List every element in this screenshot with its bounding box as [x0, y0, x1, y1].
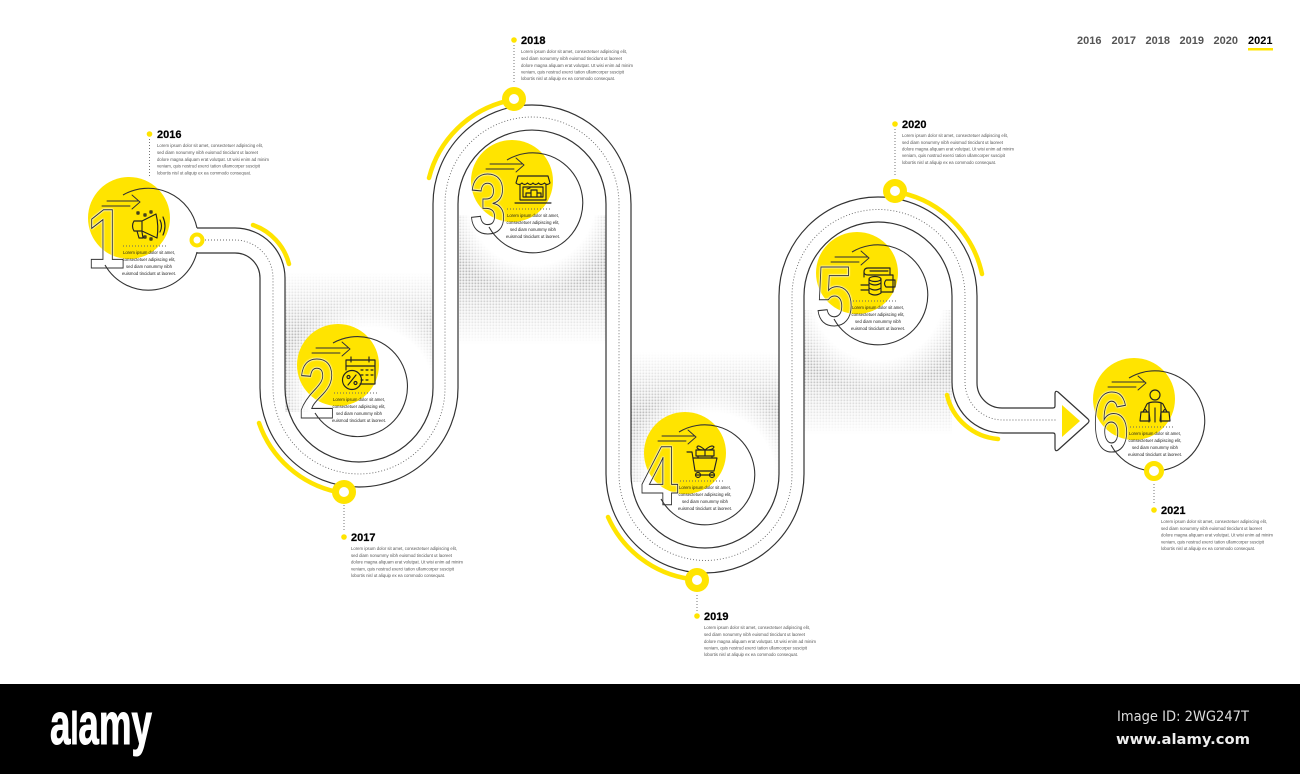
caption 1: consectetuer adipiscing elit, — [122, 257, 176, 262]
dotted rule 3 — [507, 208, 552, 210]
year block 2017: 2017 — [351, 532, 375, 544]
year block 2016: Lorem ipsum dolor sit amet, consectetuer adipiscing elit, — [157, 143, 263, 148]
dotted rule 5 — [853, 300, 898, 302]
year navigation legend — [1077, 35, 1273, 50]
arrow 5 — [831, 251, 869, 265]
caption 1: Lorem ipsum dolor sit amet, — [123, 250, 175, 255]
number 5: 5 — [816, 249, 853, 343]
dotted rule 4 — [680, 480, 725, 482]
icon: megaphone — [132, 211, 165, 240]
year navigation legend: 2017 — [1112, 35, 1136, 47]
caption 4: consectetuer adipiscing elit, — [678, 492, 732, 497]
caption 3: euismod tincidunt ut laoreet. — [506, 234, 560, 239]
year block 2018: 2018 — [521, 35, 545, 47]
number 3: 3 — [470, 157, 506, 251]
year navigation legend: 2018 — [1146, 35, 1170, 47]
caption 2: consectetuer adipiscing elit, — [332, 404, 386, 409]
year block 2021: Lorem ipsum dolor sit amet, consectetuer adipiscing elit, — [1161, 519, 1267, 524]
year block 2016: veniam, quis nostrud exerci tation ullamcorper suscipit — [157, 164, 261, 168]
number 4: 4 — [641, 429, 678, 523]
year block 2020: sed diam nonummy nibh euismod tincidunt ut laoreet — [902, 140, 1004, 145]
ring 2 — [315, 337, 407, 437]
year block 2019: sed diam nonummy nibh euismod tincidunt ut laoreet — [704, 632, 806, 637]
year block 2016: dolore magna aliquam erat volutpat. Ut wisi enim ad minim — [157, 157, 269, 162]
caption 5: Lorem ipsum dolor sit amet, — [852, 305, 904, 310]
year block 2018: dolore magna aliquam erat volutpat. Ut wisi enim ad minim — [521, 63, 633, 68]
step 6 — [1093, 358, 1205, 470]
icon: market stall — [515, 176, 551, 203]
year block 2017: dolore magna aliquam erat volutpat. Ut wisi enim ad minim — [351, 560, 463, 564]
year block 2019 — [694, 595, 816, 657]
icon: shopper with bags — [1140, 390, 1170, 422]
caption 3: sed diam nonummy nibh — [510, 227, 556, 232]
ring 6 — [1111, 371, 1205, 470]
year block 2018: veniam, quis nostrud exerci tation ullamcorper suscipit — [521, 70, 625, 74]
number 2: 2 — [299, 342, 335, 436]
caption 3 — [506, 213, 560, 239]
caption 1 — [122, 250, 176, 276]
footer bar — [0, 684, 1300, 774]
year block 2019: lobortis nisl ut aliquip ex ea commodo consequat. — [704, 652, 798, 657]
year block 2017 — [341, 505, 463, 578]
step 5 — [816, 232, 928, 345]
caption 6: consectetuer adipiscing elit, — [1128, 438, 1182, 443]
yellow accent arcs — [253, 101, 998, 579]
arrow 3 — [486, 158, 524, 172]
footer logo: alamy — [50, 692, 152, 757]
year navigation legend: 2016 — [1077, 35, 1101, 47]
year block 2020: 2020 — [902, 119, 926, 131]
year block 2019: veniam, quis nostrud exerci tation ullamcorper suscipit — [704, 646, 808, 650]
year block 2019: 2019 — [704, 611, 728, 623]
ring 5 — [834, 245, 928, 345]
caption 5: sed diam nonummy nibh — [855, 319, 901, 324]
step 1 — [87, 177, 197, 290]
year navigation legend: 2020 — [1214, 35, 1238, 47]
icon: wallet with coins — [861, 268, 895, 295]
step 4 — [641, 412, 755, 525]
halftone shading — [285, 215, 952, 482]
caption 2 — [332, 397, 386, 423]
year block 2021 — [1151, 484, 1273, 551]
year block 2020: veniam, quis nostrud exerci tation ullamcorper suscipit — [902, 153, 1006, 158]
icon: shopping cart with gifts — [687, 446, 717, 478]
step 2 — [297, 324, 407, 437]
year block 2020 — [892, 119, 1014, 177]
caption 5: euismod tincidunt ut laoreet. — [851, 326, 905, 331]
arrow 2 — [312, 342, 350, 356]
caption 6 — [1128, 431, 1182, 457]
year block 2017: Lorem ipsum dolor sit amet, consectetuer adipiscing elit, — [351, 546, 457, 551]
ring 3 — [489, 153, 583, 253]
number 1: 1 — [87, 192, 125, 286]
caption 2: Lorem ipsum dolor sit amet, — [333, 397, 385, 402]
caption 4 — [678, 485, 732, 511]
arrow 4 — [658, 430, 696, 444]
caption 5 — [851, 305, 905, 331]
arrow 1 — [102, 195, 140, 209]
year navigation legend: 2019 — [1180, 35, 1204, 47]
dotted rule 6 — [1130, 426, 1175, 428]
year block 2021: lobortis nisl ut aliquip ex ea commodo consequat. — [1161, 546, 1255, 551]
year block 2017: sed diam nonummy nibh euismod tincidunt ut laoreet — [351, 553, 453, 558]
year block 2019: dolore magna aliquam erat volutpat. Ut wisi enim ad minim — [704, 639, 816, 644]
caption 4: sed diam nonummy nibh — [682, 499, 728, 504]
footer image id: Image ID: 2WG247T — [1117, 709, 1249, 725]
yellow disc 3 — [471, 140, 553, 222]
year block 2021: veniam, quis nostrud exerci tation ullamcorper suscipit — [1161, 540, 1265, 544]
yellow disc 1 — [88, 177, 170, 259]
dotted rule 2 — [334, 392, 379, 394]
year navigation legend: 2021 — [1248, 35, 1272, 47]
icon: calendar with percent badge — [342, 357, 375, 390]
footer url: www.alamy.com — [1116, 732, 1250, 748]
caption 1: euismod tincidunt ut laoreet. — [122, 271, 176, 276]
caption 2: euismod tincidunt ut laoreet. — [332, 418, 386, 423]
arrow 6 — [1108, 376, 1146, 390]
caption 6: Lorem ipsum dolor sit amet, — [1129, 431, 1181, 436]
caption 6: sed diam nonummy nibh — [1132, 445, 1178, 450]
caption 5: consectetuer adipiscing elit, — [852, 312, 904, 317]
caption 4: euismod tincidunt ut laoreet. — [678, 506, 732, 511]
year block 2018: lobortis nisl ut aliquip ex ea commodo consequat. — [521, 76, 615, 81]
year block 2021: sed diam nonummy nibh euismod tincidunt ut laoreet — [1161, 526, 1263, 531]
year block 2020: Lorem ipsum dolor sit amet, consectetuer adipiscing elit, — [902, 133, 1008, 138]
dotted rule 1 — [123, 245, 168, 247]
year block 2016: lobortis nisl ut aliquip ex ea commodo consequat. — [157, 170, 251, 176]
yellow disc 6 — [1093, 358, 1175, 440]
arrow yellow triangle — [1062, 405, 1080, 437]
ring 4 — [661, 425, 755, 525]
ring 1 — [105, 188, 197, 290]
yellow disc 4 — [644, 412, 726, 494]
caption 3: consectetuer adipiscing elit, — [506, 220, 560, 225]
route nodes — [192, 90, 1162, 588]
yellow disc 5 — [816, 232, 898, 314]
winding road outline with arrow — [197, 105, 1089, 573]
year block 2016: sed diam nonummy nibh euismod tincidunt ut laoreet — [157, 150, 259, 155]
year block 2020: lobortis nisl ut aliquip ex ea commodo consequat. — [902, 160, 996, 165]
caption 4: Lorem ipsum dolor sit amet, — [679, 485, 731, 490]
year block 2016 — [147, 129, 269, 178]
number 6: 6 — [1093, 375, 1129, 469]
step 3 — [470, 140, 583, 253]
yellow disc 2 — [297, 324, 379, 406]
year block 2017: veniam, quis nostrud exerci tation ullamcorper suscipit — [351, 566, 455, 572]
year block 2018: Lorem ipsum dolor sit amet, consectetuer adipiscing elit, — [521, 49, 627, 54]
year block 2021: 2021 — [1161, 505, 1185, 517]
caption 3: Lorem ipsum dolor sit amet, — [507, 213, 559, 218]
year block 2018 — [511, 35, 633, 84]
caption 1: sed diam nonummy nibh — [126, 264, 172, 269]
year block 2018: sed diam nonummy nibh euismod tincidunt ut laoreet — [521, 56, 623, 61]
caption 6: euismod tincidunt ut laoreet. — [1128, 452, 1182, 457]
year block 2021: dolore magna aliquam erat volutpat. Ut wisi enim ad minim — [1161, 532, 1273, 538]
caption 2: sed diam nonummy nibh — [336, 411, 382, 416]
road dotted centre line — [205, 117, 1057, 560]
year block 2016: 2016 — [157, 129, 181, 141]
year block 2017: lobortis nisl ut aliquip ex ea commodo consequat. — [351, 573, 445, 578]
year block 2020: dolore magna aliquam erat volutpat. Ut wisi enim ad minim — [902, 146, 1014, 152]
year block 2019: Lorem ipsum dolor sit amet, consectetuer adipiscing elit, — [704, 625, 810, 630]
